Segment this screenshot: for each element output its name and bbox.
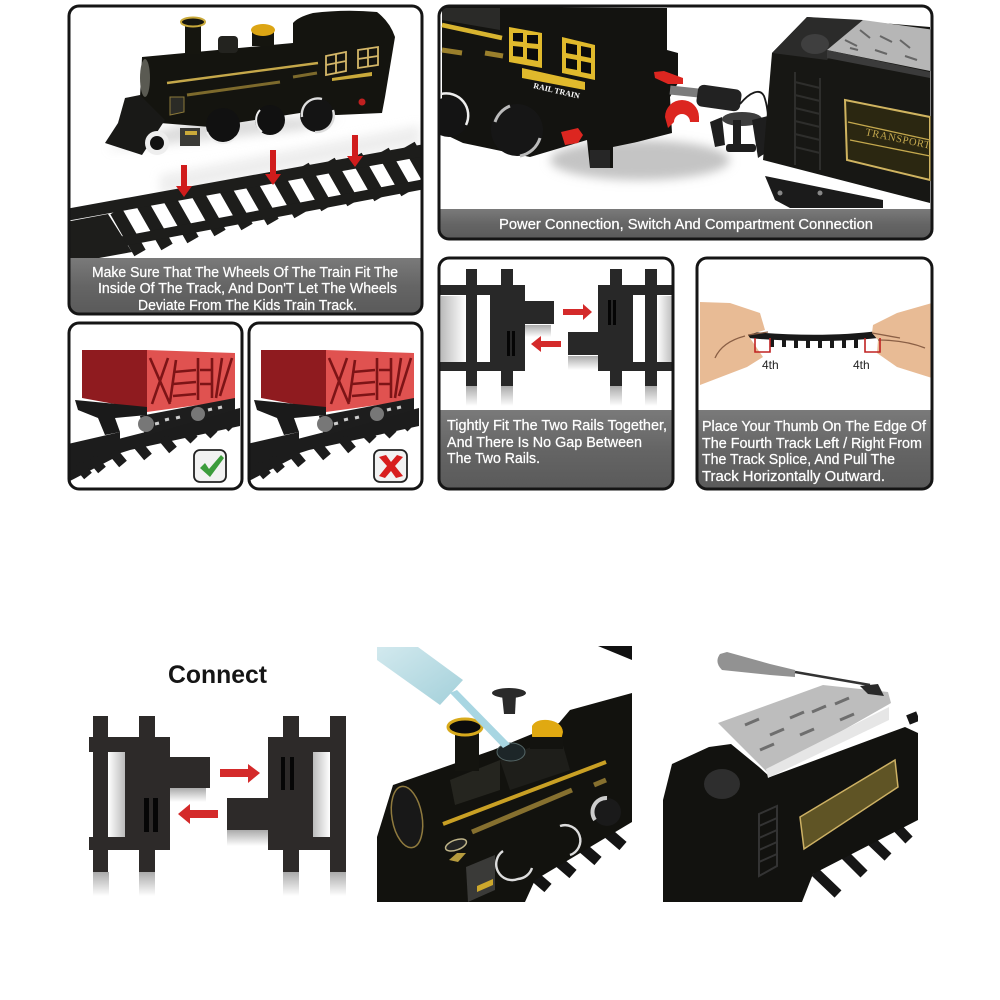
caption text: Place Your Thumb On The Edge Of [702,419,927,435]
black corner [598,646,632,660]
red arrows [178,764,260,824]
caption text: Inside Of The Track, And Don'T Let The Wheels [98,281,397,297]
fourth track labels [762,360,869,369]
caption text: The Track Splice, And Pull The [702,452,895,468]
tender: TRANSPORT [864,127,932,152]
left track piece [89,716,210,872]
boiler highlights [450,760,500,805]
fourth track labels: 4th [762,358,779,372]
red arrows [531,304,592,352]
gold lines [443,762,606,824]
track [66,145,433,264]
ladder side [759,806,777,876]
icon: red cross [374,450,407,482]
panel: wheels fit inside the track [66,6,433,314]
right track piece [227,716,346,872]
gold plate [800,760,898,849]
caption text: Tightly Fit The Two Rails Together, [447,418,667,434]
left hand [700,302,768,385]
plates and wheels [444,798,621,902]
coupler [710,112,770,158]
panel: power connection [429,6,935,239]
photo: filling water into locomotive [377,646,632,902]
locomotive cab: RAIL TRAIN [533,81,581,101]
red markers [755,338,880,352]
track reflections [93,788,346,896]
coal tray [718,685,891,778]
panel: pull the track apart [697,258,932,489]
syringe [717,652,884,696]
caption text [702,419,927,485]
plug [492,688,526,714]
right hand [872,303,932,378]
panel: correct wagon placement [68,323,242,489]
water port [497,743,525,761]
left rail piece [439,269,554,386]
caption text: The Two Rails. [447,451,540,467]
track section [744,331,878,348]
locomotive cab [429,7,678,168]
tender body [663,727,918,902]
photo: filling coal tender [663,652,918,902]
floor shadow [550,140,730,180]
red arrows [176,135,363,197]
caption bar [697,410,932,489]
shadows [441,296,673,406]
locomotive [105,11,395,155]
track shadow [160,125,420,195]
tender [763,17,935,208]
locomotive body [377,693,632,902]
right rail piece [568,269,673,386]
track sleepers [534,832,626,892]
dome [704,769,740,799]
caption bar [439,410,673,489]
caption text: Power Connection, Switch And Compartment Connection [499,217,873,233]
fourth track labels: 4th [853,358,870,372]
caption text: Make Sure That The Wheels Of The Train Fit The [92,265,398,281]
red switch and connectors [561,71,699,145]
icon: green check [194,450,226,482]
caption text: Deviate From The Kids Train Track. [138,298,357,314]
caption text: Track Horizontally Outward. [702,469,885,485]
connect diagram [89,716,346,896]
panel: incorrect wagon placement [247,323,422,489]
heading: connect: Connect [168,661,268,689]
caption text [92,265,398,314]
syringe [377,647,510,748]
caption text [447,418,667,467]
gold dome [532,720,563,737]
caption text: The Fourth Track Left / Right From [702,436,922,452]
chimney [455,731,479,771]
caption text: And There Is No Gap Between [447,435,642,451]
power plug and wire [670,84,768,115]
caption bar [69,258,422,314]
panel: fit the two rails together [439,258,673,489]
right track [815,716,918,894]
smokebox [390,786,424,848]
caption bar [439,209,932,239]
